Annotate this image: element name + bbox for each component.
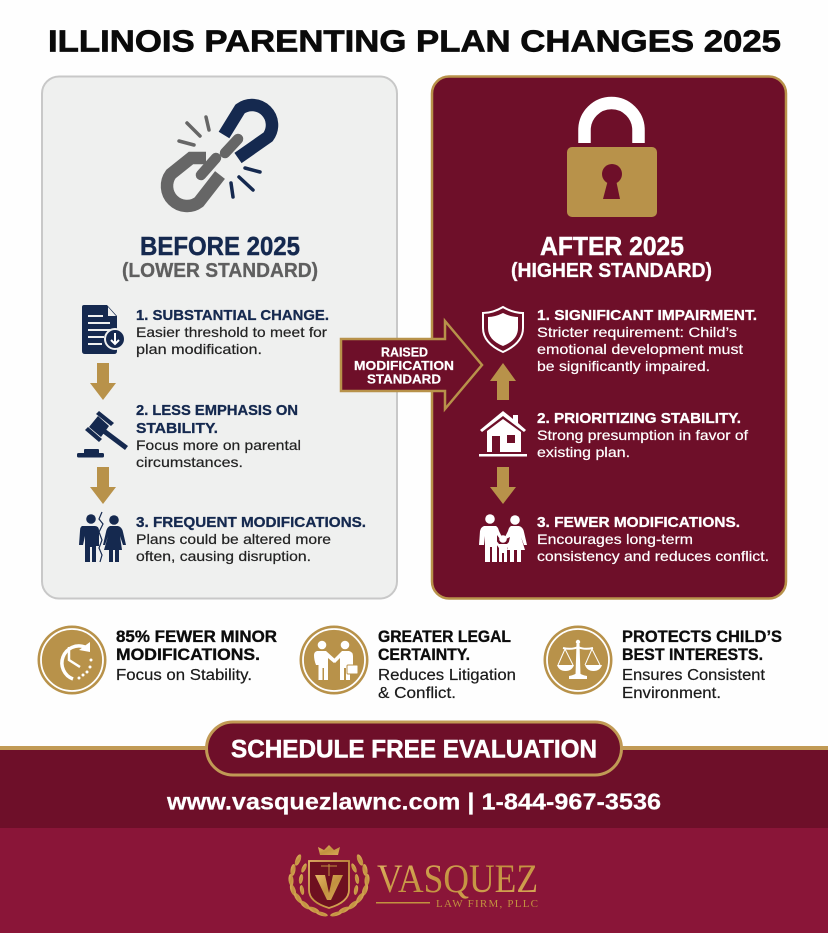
text: significant impairment: be significantly impaired. <box>537 358 710 374</box>
benefit text: CERTAINTY. <box>378 645 470 664</box>
icon: padlock <box>567 103 657 217</box>
button: schedule free evaluation: SCHEDULE FREE EVALUATION <box>231 736 597 764</box>
arrow: up <box>490 363 516 400</box>
benefit text: PROTECTS CHILD’S <box>622 627 782 646</box>
icon: house <box>479 411 527 456</box>
icon: broken chain link <box>167 105 272 206</box>
text: significant impairment <box>537 307 757 374</box>
benefit text: & Conflict. <box>378 685 456 702</box>
text: significant impairment: emotional development must <box>537 341 743 357</box>
logo tagline: LAW FIRM, PLLC <box>436 898 538 910</box>
benefit: fewer minor modifications <box>38 626 277 694</box>
text: substantial change: 1. SUBSTANTIAL CHANGE. <box>136 307 329 324</box>
text: prioritizing stability: 2. PRIORITIZING STABILITY. <box>537 410 741 427</box>
panel background <box>432 76 786 598</box>
text: less emphasis on stability: STABILITY. <box>136 420 218 437</box>
logo wordmark: VASQUEZ <box>377 856 538 901</box>
text: fewer modifications: consistency and reduces conflict. <box>537 548 769 564</box>
button: schedule free evaluation <box>206 722 622 775</box>
text: less emphasis on stability <box>136 402 301 470</box>
icon: shield <box>483 307 523 352</box>
text: fewer modifications: Encourages long-term <box>537 531 693 547</box>
text: substantial change: Easier threshold to meet for <box>136 324 327 340</box>
title: ILLINOIS PARENTING PLAN CHANGES 2025 <box>48 24 781 58</box>
text: substantial change: plan modification. <box>136 341 262 357</box>
arrow: down <box>90 467 116 504</box>
footer band <box>0 746 828 933</box>
arrow: raised modification standard: MODIFICATION <box>354 359 454 373</box>
text: less emphasis on stability: circumstances. <box>136 454 243 470</box>
benefit text <box>116 627 277 684</box>
arrow: raised modification standard: RAISED <box>381 346 428 360</box>
subheading: higher standard: (HIGHER STANDARD) <box>511 259 712 282</box>
logo: vasquez law firm <box>288 845 538 917</box>
subheading: lower standard: (LOWER STANDARD) <box>122 259 318 282</box>
icon: handshake <box>300 626 368 694</box>
benefit text: Reduces Litigation <box>378 667 516 684</box>
benefit text: Ensures Consistent <box>622 667 766 684</box>
benefit: greater legal certainty <box>300 626 516 702</box>
text: significant impairment: Stricter requirement: Child’s <box>537 324 737 340</box>
icon: document <box>82 305 125 354</box>
benefit text: 85% FEWER MINOR <box>116 627 277 646</box>
text: frequent modifications: Plans could be altered more <box>136 531 331 547</box>
text: fewer modifications: 3. FEWER MODIFICATIONS. <box>537 514 740 531</box>
icon: gavel <box>77 411 128 458</box>
text: prioritizing stability: Strong presumption in favor of <box>537 427 748 443</box>
benefit: protects child's best interests <box>544 626 782 702</box>
text: fewer modifications <box>537 514 769 564</box>
benefit text: GREATER LEGAL <box>378 627 511 646</box>
text: frequent modifications: often, causing disruption. <box>136 548 311 564</box>
icon: clock <box>38 626 106 694</box>
text: significant impairment: 1. SIGNIFICANT IMPAIRMENT. <box>537 307 757 324</box>
benefit text: Focus on Stability. <box>116 667 252 684</box>
panel background <box>42 76 397 598</box>
icon: separated couple <box>79 512 126 562</box>
logo emblem <box>288 845 370 917</box>
arrow: down <box>490 467 516 504</box>
contact line: www.vasquezlawnc.com | 1-844-967-3536 <box>166 788 661 814</box>
text: prioritizing stability: existing plan. <box>537 444 630 460</box>
text: frequent modifications: 3. FREQUENT MODIFICATIONS. <box>136 514 366 531</box>
panel: after 2025 <box>432 76 786 598</box>
right laurel <box>330 854 370 917</box>
benefit text: BEST INTERESTS. <box>622 645 763 664</box>
heading: before 2025: BEFORE 2025 <box>140 233 300 261</box>
benefit text <box>622 627 782 702</box>
benefit text: Environment. <box>622 685 721 702</box>
arrow: raised modification standard: STANDARD <box>367 372 441 386</box>
icon: scales of justice <box>544 626 612 694</box>
text: frequent modifications <box>136 514 366 564</box>
benefit text <box>378 627 516 702</box>
panel: before 2025 <box>42 76 397 598</box>
arrow: down <box>90 363 116 400</box>
text: prioritizing stability <box>537 410 748 460</box>
heading: after 2025: AFTER 2025 <box>540 233 684 261</box>
arrow: raised modification standard <box>341 321 482 409</box>
left laurel <box>288 854 328 917</box>
text: less emphasis on stability: 2. LESS EMPHASIS ON <box>136 402 298 419</box>
benefit text: MODIFICATIONS. <box>116 645 260 664</box>
text: less emphasis on stability: Focus more on parental <box>136 437 301 453</box>
text: substantial change <box>136 307 329 357</box>
icon: family <box>479 514 527 562</box>
